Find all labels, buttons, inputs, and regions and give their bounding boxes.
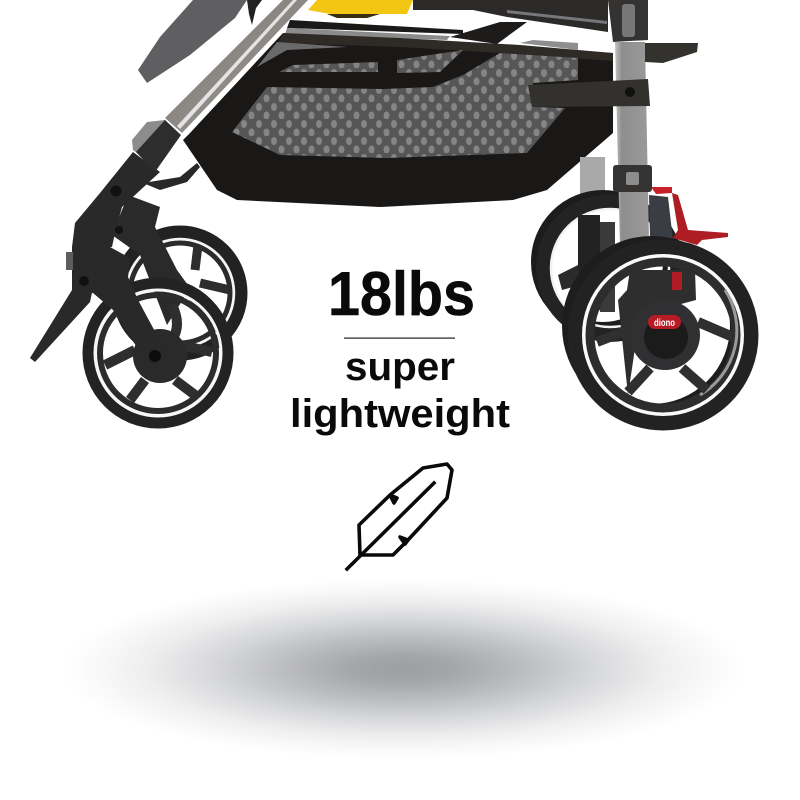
- front right wheel behind: [568, 242, 736, 410]
- spokes: [597, 322, 733, 392]
- gray right strip: [520, 40, 578, 50]
- basket rim: [278, 33, 613, 61]
- label: super lightweight: lightweight: [290, 392, 510, 436]
- diono badge: diono: [654, 318, 675, 329]
- seat frame tubes: [413, 0, 608, 32]
- brake lever: [30, 288, 93, 362]
- pad strap: [247, 0, 262, 25]
- diono badge: [648, 315, 681, 329]
- dark joint sleeve: [136, 120, 181, 172]
- wheel interior: [618, 270, 696, 395]
- lower pole clamp: [613, 165, 652, 192]
- wheel hub: [630, 300, 700, 370]
- under-seat basket: [183, 22, 613, 207]
- label: super lightweight: [290, 345, 510, 436]
- mesh strip: [279, 62, 378, 72]
- rear frame pole: [580, 157, 605, 201]
- left frame strut: [143, 163, 200, 190]
- top basket bar: [287, 20, 463, 34]
- lower fork arm: [72, 247, 165, 363]
- arm pad: [138, 0, 247, 83]
- top-left mesh: [257, 42, 347, 67]
- stroller lower half photo: [30, 0, 751, 423]
- gray basket strip: [285, 28, 450, 40]
- cross straps: [450, 22, 527, 44]
- red latch: [672, 272, 682, 290]
- footrest: [645, 43, 698, 63]
- ground shadow: [61, 579, 745, 759]
- wheel hub: [133, 329, 187, 383]
- mesh patch: [397, 50, 463, 73]
- pole bracket: [528, 79, 650, 107]
- divider line: [344, 338, 455, 339]
- fork side tab: [66, 252, 73, 270]
- spokes: [105, 305, 212, 400]
- top pole clamp: [608, 0, 648, 42]
- front left wheel: [89, 284, 227, 422]
- front left back wheel: [119, 232, 241, 354]
- left fork: [30, 152, 165, 363]
- hub cap: [644, 315, 688, 359]
- fork bolts: [110, 186, 122, 196]
- rear wheel far: [537, 196, 669, 328]
- front right wheel: [575, 247, 751, 423]
- brake housing: [649, 195, 673, 240]
- weight heading: 18lbs: [328, 260, 475, 329]
- rear wheel near: [543, 201, 677, 335]
- seat underside: [327, 14, 380, 18]
- right main pole: [615, 42, 649, 247]
- mesh panel: [232, 53, 578, 158]
- label: super lightweight: super: [345, 345, 455, 389]
- gray joint cap: [132, 120, 170, 155]
- left silver tube: [165, 0, 308, 133]
- icon: feather: [347, 464, 452, 569]
- inner rim glint: [700, 290, 737, 395]
- yellow seat bottom: [308, 0, 413, 14]
- rear fork arm: [112, 195, 190, 325]
- red brake pedal: [651, 187, 728, 245]
- upper fork arm: [72, 152, 160, 247]
